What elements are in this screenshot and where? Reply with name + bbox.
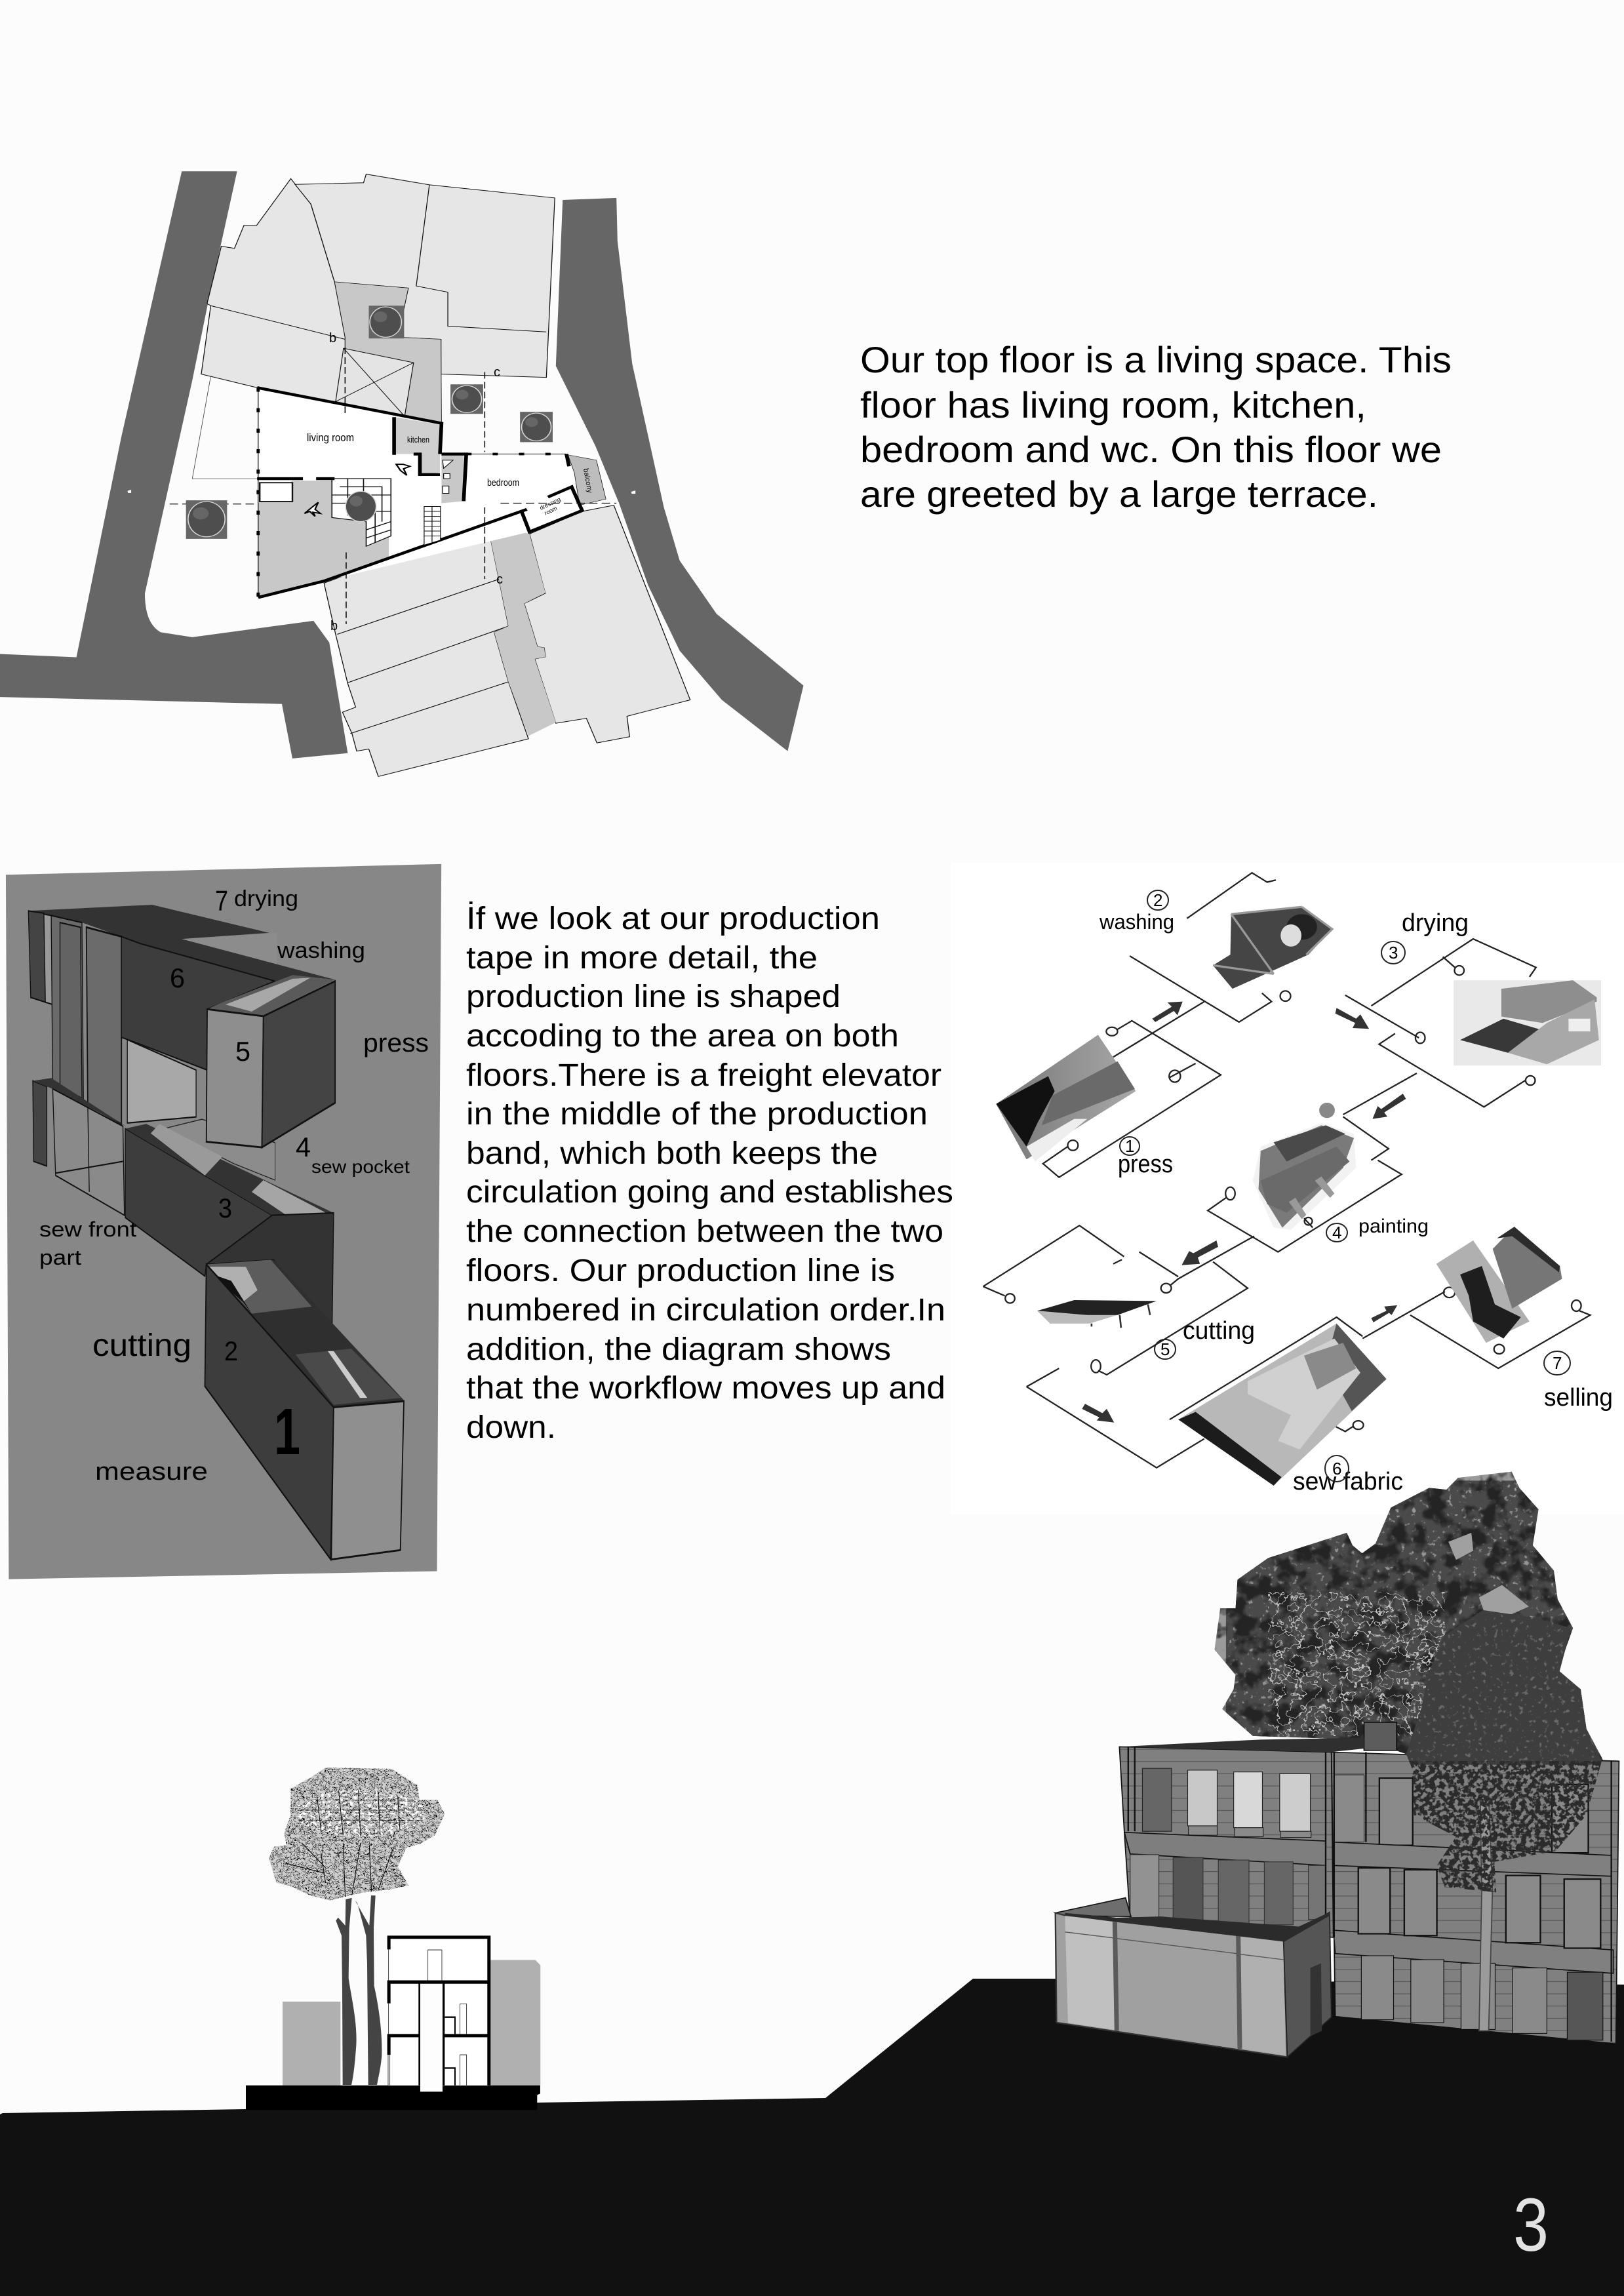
plinth: [246, 2086, 540, 2110]
facade right: [1332, 1752, 1619, 2044]
plan labels: living room: [307, 431, 354, 444]
service strip: [487, 524, 556, 736]
people figures: [304, 464, 410, 517]
extension front: [1056, 1913, 1288, 2057]
text block: top floor description: are greeted by a large terrace.: [860, 473, 1378, 515]
text block: production line description: addition, the diagram shows: [466, 1332, 891, 1367]
flow labels: cutting: [1183, 1317, 1255, 1345]
road: right street: [556, 198, 803, 751]
arrow: washing to drying: [1336, 1008, 1369, 1029]
flow labels: washing: [1099, 910, 1174, 934]
neighbour buildings top right: [295, 174, 555, 378]
photo: dyeing machine: [1253, 1123, 1356, 1230]
text block: production line description: down.: [466, 1410, 556, 1445]
block 5 top photo: [207, 975, 335, 1016]
step 4 painting hand drawn frame: [1161, 1117, 1402, 1293]
axonometric labels: sew front: [39, 1217, 136, 1241]
axonometric labels: 2: [224, 1336, 238, 1366]
tree icon 5 in stair void: [345, 491, 377, 522]
outside stairs: [424, 506, 441, 545]
block 5 side: [262, 981, 335, 1147]
tree icon 4: [186, 500, 227, 539]
tree trunk left: [336, 1898, 357, 2085]
axonometric labels: part: [39, 1246, 81, 1269]
axonometric labels: 3: [218, 1193, 232, 1223]
extension roof deck: [1056, 1898, 1131, 1916]
tree icon 2: [450, 384, 483, 414]
extension roof strip: [1065, 1912, 1330, 1942]
long block end face: [331, 1401, 404, 1560]
ground silhouette: [0, 1979, 1624, 2296]
plan labels: room: [544, 505, 558, 517]
text block: top floor description: Our top floor is a living space. This: [860, 339, 1452, 380]
axonometric labels: 1: [274, 1395, 300, 1469]
plan labels: b: [329, 331, 336, 346]
step digits: 1: [1125, 1136, 1134, 1156]
step 3 drying hand drawn frame: [1343, 939, 1536, 1115]
skylight with cross: [336, 348, 414, 416]
long block roof: [207, 1259, 404, 1407]
facade left: [1119, 1747, 1334, 1937]
site outline: [192, 376, 257, 479]
extension light bay: [1065, 1916, 1117, 2030]
canopy line work: [267, 1765, 448, 1903]
front tree trunk: [1479, 1797, 1492, 2031]
text block: production line description: circulation going and establishes: [466, 1175, 953, 1210]
tree trunk right: [355, 1895, 382, 2085]
text block: production line description: İf we look at our production: [466, 901, 880, 936]
text block: production line description: numbered in circulation order.In: [466, 1293, 945, 1328]
chimney box: [1364, 1722, 1396, 1751]
text block: production line description: floors. Our production line is: [466, 1254, 895, 1288]
upper left columns: [28, 911, 45, 1002]
text block: production line description: the connection between the two: [466, 1214, 943, 1249]
axonometric labels: 6: [170, 962, 185, 993]
plan labels: c: [494, 365, 500, 380]
wall 3 roof strip: [125, 1124, 334, 1229]
plan labels: dressing: [539, 496, 562, 511]
site floor plan: [0, 171, 803, 776]
middle windows right: [1358, 1868, 1600, 1948]
lower windows left: [1130, 1855, 1326, 1925]
lift gap: [164, 1119, 275, 1180]
block 2 back side: [207, 1213, 334, 1323]
step 7 selling hand drawn frame: [1410, 1288, 1590, 1368]
extension right bay: [1239, 1935, 1286, 2055]
back light wall: [182, 933, 277, 964]
wc floor: [441, 454, 464, 504]
wall 3: [125, 1128, 272, 1276]
photo: ironing press: [996, 1035, 1136, 1162]
house structure: [387, 1935, 490, 2086]
fascia line: [1065, 1932, 1284, 1960]
light opening: [127, 1040, 196, 1123]
long block side wall: [205, 1265, 334, 1560]
text block: top floor description: [860, 339, 1452, 515]
roof photo one: [207, 1259, 311, 1314]
party lines bottom: [337, 579, 508, 734]
step digits: 2: [1153, 890, 1162, 910]
arrow: painting to cutting: [1181, 1240, 1218, 1265]
page number: 3: [1513, 2183, 1549, 2267]
arrow: sewing to selling: [1371, 1305, 1397, 1322]
circled step numbers: [1120, 890, 1570, 1482]
extension pillars and fascia: [1115, 1922, 1240, 2049]
axonometric labels: measure: [95, 1458, 208, 1486]
facade verticals: [1128, 1747, 1612, 2042]
lower glass wall: [52, 1089, 125, 1216]
step 1 press hand drawn frame: [1043, 1002, 1221, 1178]
text block: production line description: floors.There is a freight elevator: [466, 1058, 941, 1093]
axonometric labels: 5: [235, 1036, 250, 1067]
inner furniture walls: [445, 2017, 455, 2086]
axonometric labels: washing: [277, 938, 365, 963]
axonometric labels: press: [363, 1029, 429, 1058]
plan labels: [307, 331, 594, 633]
arrow: cutting to sewing: [1082, 1404, 1114, 1423]
text block: production line description: production line is shaped: [466, 980, 841, 1014]
flow labels: selling: [1544, 1384, 1613, 1412]
arrow: drying to painting: [1372, 1094, 1406, 1119]
road markers: [127, 490, 635, 494]
extension side wall: [1284, 1912, 1332, 2057]
step 6 sewing hand drawn frame: [1027, 1292, 1445, 1468]
road: left street: [0, 171, 347, 759]
section cut lines: [170, 347, 616, 624]
section drawing with tree: [246, 1765, 540, 2110]
roof edge: [1119, 1738, 1364, 1752]
neighbour buildings bottom left: [324, 523, 528, 776]
flow labels: [1099, 909, 1613, 1495]
text block: production line description: in the middle of the production: [466, 1097, 928, 1132]
neighbour buildings top left: [201, 178, 345, 403]
neighbour party lines: [210, 185, 546, 340]
upper roof: [28, 905, 335, 1014]
grey background sheet: [6, 864, 441, 1579]
step digits: 5: [1160, 1339, 1170, 1359]
text block: production line description: band, which both keeps the: [466, 1136, 878, 1171]
photo: cutting table: [1037, 1300, 1157, 1328]
lower left column: [33, 1081, 47, 1166]
top floor slab: [257, 387, 608, 597]
roof photo light corner: [209, 1267, 258, 1302]
photo strip one: [151, 1124, 222, 1176]
front tree canopy: [1402, 1606, 1610, 1901]
axonometric labels: drying: [234, 886, 298, 911]
plan labels: bedroom: [487, 477, 519, 488]
step digits: 3: [1389, 943, 1398, 962]
axonometric labels: sew pocket: [311, 1157, 410, 1177]
dashed glazing lines: [258, 387, 566, 597]
rear perspective of building with trees: [1056, 1470, 1619, 2057]
house interior: [388, 1937, 490, 2086]
text block: production line description: tape in more detail, the: [466, 941, 818, 976]
tree icon 1: [369, 306, 404, 338]
text block: top floor description: bedroom and wc. On this floor we: [860, 429, 1442, 470]
balcony: [568, 455, 606, 505]
flow labels: painting: [1358, 1216, 1429, 1237]
lift: [260, 483, 292, 502]
axonometric labels: 7: [215, 885, 228, 917]
text block: top floor description: floor has living room, kitchen,: [860, 384, 1366, 426]
axonometric labels: cutting: [92, 1328, 191, 1363]
step digits: [1125, 890, 1562, 1478]
terrace: [258, 481, 389, 597]
block 5 top photo highlight: [226, 978, 310, 1012]
photo strip two: [252, 1180, 327, 1229]
dark roof skylight: [1475, 1724, 1535, 1749]
step digits: 6: [1332, 1459, 1341, 1478]
roof photo two: [296, 1349, 401, 1405]
neighbour block right: [490, 1960, 540, 2086]
step digits: 4: [1332, 1223, 1341, 1242]
extension door: [1311, 1963, 1322, 2036]
panel: axonometric production tape: [6, 864, 441, 1579]
plan labels: balcony: [582, 467, 594, 494]
flow labels: drying: [1402, 909, 1469, 937]
neighbour block left: [283, 2002, 340, 2086]
step digits: 7: [1553, 1353, 1562, 1373]
photo: woman in skirt: [1436, 1227, 1562, 1343]
panel: seven step production flow diagram: [983, 873, 1613, 1495]
wc fittings: [443, 460, 453, 493]
axonometric labels: 4: [296, 1132, 311, 1162]
plan labels: kitchen: [407, 435, 429, 445]
text block: production line description: accoding to the area on both: [466, 1019, 899, 1054]
tree icon 3: [520, 412, 553, 442]
photo: dryer machine: [1454, 980, 1601, 1065]
block 5 front: [207, 1009, 264, 1147]
roof photo dark edge: [210, 1274, 252, 1314]
thin glazing lines and partitions: [388, 1949, 467, 2086]
wall 6: [121, 937, 275, 1070]
step 2 washing hand drawn frame: [1130, 873, 1290, 1022]
floor band left: [1124, 1832, 1326, 1865]
photo: washing machine: [1213, 907, 1332, 989]
dense crown centre: [295, 1788, 426, 1838]
kitchen floor: [395, 417, 440, 475]
neighbour buildings bottom right: [525, 505, 690, 743]
courtyard: [334, 282, 441, 424]
upper windows right: [1334, 1775, 1589, 1853]
flow labels: press: [1118, 1151, 1173, 1178]
staircase: [332, 479, 391, 546]
thick walls: [257, 387, 582, 597]
window sills: [1189, 1826, 1311, 1838]
panel: production diagram white sheet: [951, 863, 1624, 1514]
axonometric labels: [39, 885, 429, 1486]
plan labels: c: [496, 572, 503, 587]
icon: 800 kg badge: [1319, 1103, 1335, 1118]
floor bands right: [1334, 1842, 1612, 1876]
elevator core: [420, 1984, 443, 2091]
lower windows right: [1361, 1956, 1603, 2040]
big tree canopy: [1211, 1470, 1610, 1765]
text block: production line description: that the workflow moves up and: [466, 1371, 945, 1406]
flow labels: sew fabric: [1293, 1468, 1403, 1495]
upper windows left: [1142, 1768, 1311, 1831]
plan labels: b: [330, 619, 338, 633]
step 5 cutting hand drawn frame: [983, 1225, 1248, 1375]
photo: sewing machines: [1178, 1324, 1387, 1486]
text block: production line description: [466, 901, 953, 1445]
canopy fill: [269, 1768, 445, 1901]
arrow: press to washing: [1152, 1002, 1183, 1022]
